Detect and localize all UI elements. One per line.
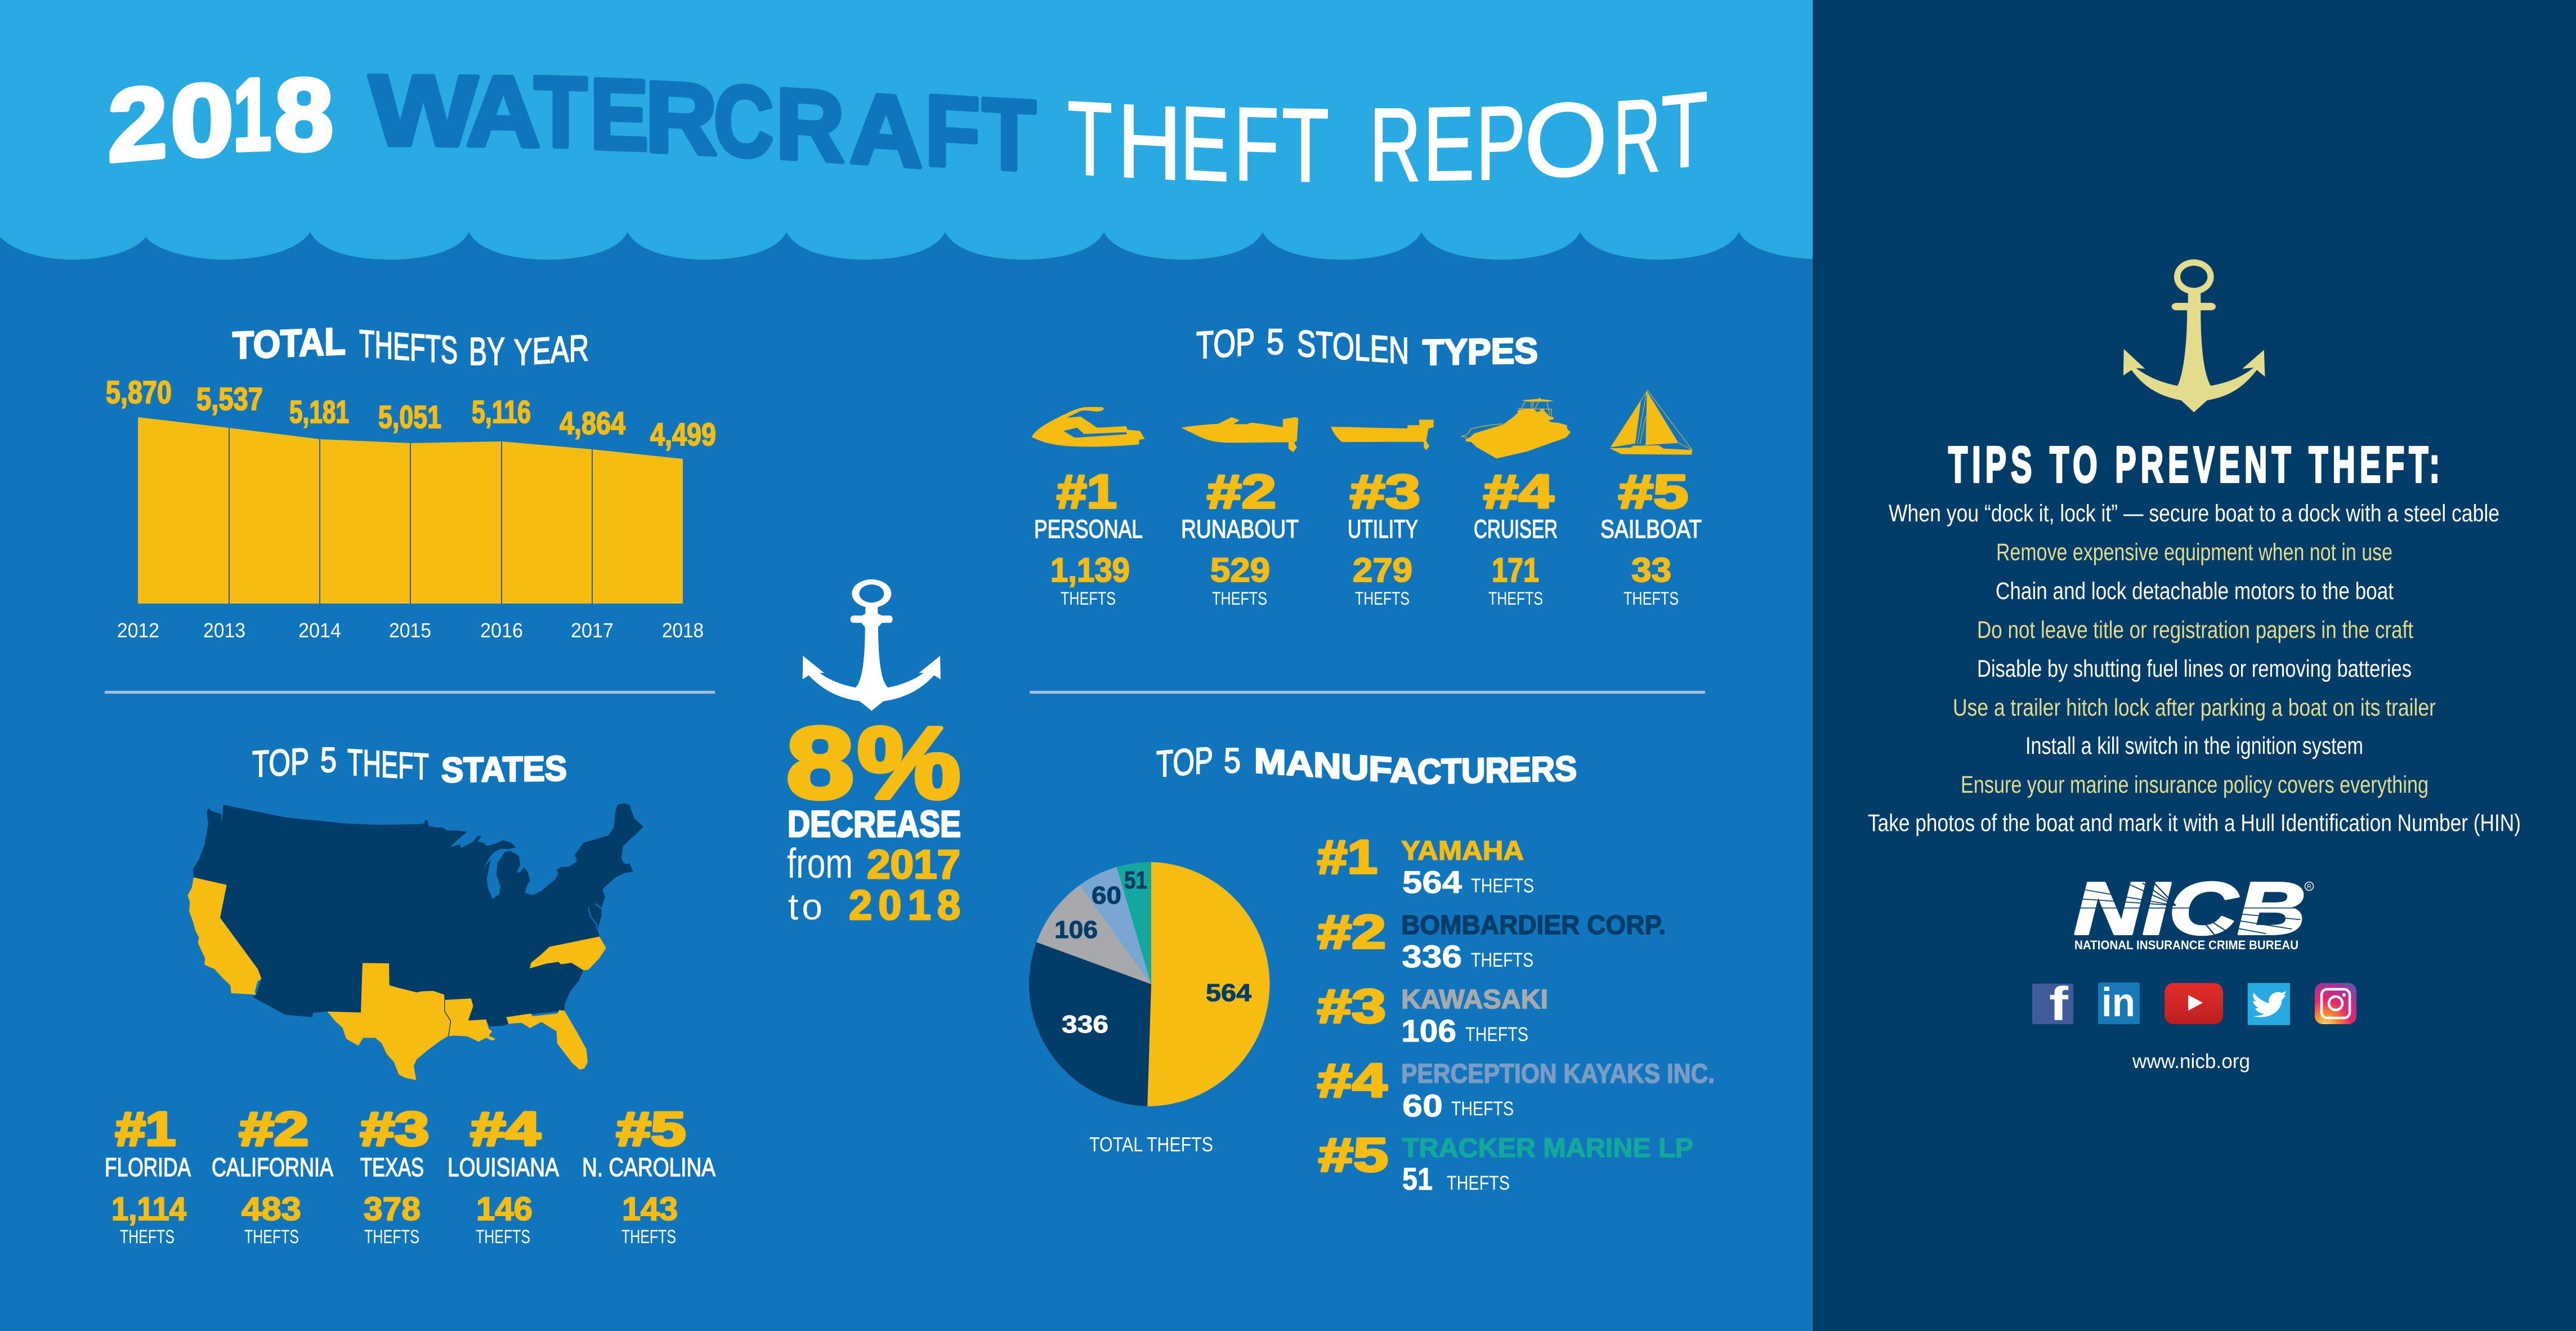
manufacturer thefts captions: THEFTS — [1451, 1098, 1514, 1120]
decrease: DECREASE — [788, 803, 961, 845]
state names: CALIFORNIA — [212, 1153, 333, 1182]
heading: top 5 theft states: 5 — [320, 741, 337, 780]
type values: 1,139 — [1050, 551, 1130, 589]
title words: THEFT REPORT: P — [1476, 84, 1526, 202]
state values: 143 — [622, 1191, 678, 1227]
chart years: 2013 — [203, 619, 245, 642]
title word: 2018: 2 — [108, 65, 167, 184]
title words: THEFT REPORT: E — [1423, 86, 1474, 203]
manufacturer values — [1401, 864, 1462, 1196]
chart years: 2012 — [117, 619, 159, 642]
heading: top 5 stolen types — [1196, 320, 1538, 373]
rank numbers: #3 — [1350, 465, 1420, 518]
state ranks — [115, 1102, 686, 1155]
rank numbers: #4 — [1483, 465, 1554, 518]
manufacturer thefts captions: THEFTS — [1465, 1024, 1528, 1046]
pie chart: 564 — [1206, 979, 1252, 1007]
type labels: CRUISER — [1474, 515, 1558, 543]
heading: top 5 manufacturers: TOP — [1156, 739, 1213, 785]
type labels — [1034, 515, 1702, 543]
type values: 33 — [1631, 551, 1671, 589]
callout: 8% decrease — [786, 579, 961, 928]
state thefts captions: THEFTS — [364, 1226, 419, 1248]
continental US — [193, 803, 643, 1026]
icon: cruiser — [1461, 397, 1571, 458]
tips list: Chain and lock detachable motors to the boat — [1996, 578, 2394, 605]
icon: facebook: f — [2049, 977, 2069, 1030]
heading: top 5 manufacturers: CTURERS — [1417, 749, 1577, 792]
manufacturer values: 60 — [1402, 1088, 1443, 1123]
type labels: PERSONAL — [1034, 515, 1143, 543]
state: Florida — [506, 1010, 588, 1070]
NICB logo: NATIONAL INSURANCE CRIME BUREAU — [2074, 938, 2298, 952]
type values — [1050, 551, 1671, 589]
pie chart — [1029, 862, 1269, 1106]
manufacturer names: PERCEPTION KAYAKS INC. — [1401, 1059, 1715, 1089]
tips list — [1868, 500, 2521, 837]
rank numbers: #2 — [1207, 465, 1276, 518]
title words: THEFT REPORT: F — [1234, 86, 1279, 203]
sky header with scalloped waves — [0, 0, 1813, 260]
pie chart: 106 — [1054, 916, 1098, 944]
title word: 2018: 1 — [233, 57, 271, 172]
type values: 529 — [1210, 551, 1270, 589]
icon: twitter — [2248, 983, 2290, 1025]
from: from — [787, 840, 853, 887]
title words: THEFT REPORT: T — [1661, 70, 1708, 191]
title word: WATERCRAFT: A — [849, 72, 923, 189]
state ranks: #5 — [616, 1102, 686, 1155]
title word: 2018: 0 — [171, 63, 234, 178]
title words: THEFT REPORT — [1067, 70, 1708, 204]
icon: sailboat — [1609, 390, 1692, 455]
tips list: Do not leave title or registration papers in the craft — [1977, 617, 2413, 644]
chart years: 2017 — [571, 619, 614, 642]
US map — [187, 803, 643, 1080]
chart values: 5,181 — [289, 394, 349, 430]
state names: LOUISIANA — [448, 1153, 559, 1182]
chart values: 5,116 — [472, 394, 531, 430]
type labels: UTILITY — [1348, 515, 1418, 543]
title word: WATERCRAFT: A — [466, 55, 540, 168]
8 percent: 8 — [786, 707, 854, 820]
heading: total thefts by year: TOTAL — [232, 320, 346, 367]
heading: top 5 theft states — [252, 740, 567, 790]
icon: linkedin: in — [2101, 980, 2135, 1025]
chart years — [117, 619, 704, 642]
icon: personal watercraft — [1032, 407, 1145, 446]
title word: WATERCRAFT: F — [925, 74, 980, 189]
state values: 378 — [364, 1191, 421, 1227]
state: Louisiana — [445, 998, 495, 1042]
tips list: Ensure your marine insurance policy covers everything — [1961, 771, 2429, 798]
chart years: 2018 — [662, 619, 704, 642]
NICB logo: NICB — [2074, 867, 2306, 950]
state values: 483 — [242, 1191, 301, 1227]
manufacturer names: BOMBARDIER CORP. — [1401, 910, 1666, 940]
manufacturer names: YAMAHA — [1401, 836, 1524, 866]
rank numbers: #1 — [1057, 465, 1117, 518]
title words: THEFT REPORT: T — [1067, 79, 1112, 198]
manufacturer ranks: #5 — [1318, 1128, 1388, 1181]
manufacturer values: 564 — [1402, 864, 1462, 900]
manufacturer names: TRACKER MARINE LP — [1402, 1133, 1693, 1163]
heading: top 5 manufacturers: 5 — [1224, 742, 1241, 780]
heading: total thefts by year: BY — [469, 329, 505, 373]
pie caption: TOTAL THEFTS — [1089, 1133, 1213, 1156]
title word: WATERCRAFT — [369, 54, 1036, 192]
chart values: 4,499 — [650, 417, 716, 453]
title word: WATERCRAFT: C — [714, 64, 773, 179]
title words: THEFT REPORT: E — [1180, 84, 1229, 203]
state names: TEXAS — [360, 1153, 424, 1182]
manufacturer thefts captions: THEFTS — [1447, 1172, 1510, 1194]
thefts captions: THEFTS — [1355, 588, 1410, 609]
tips list: Use a trailer hitch lock after parking a boat on its trailer — [1953, 694, 2436, 721]
to: to — [788, 886, 822, 927]
heading: top 5 stolen types: TOP — [1196, 320, 1255, 367]
chart values: 5,051 — [378, 399, 441, 435]
manufacturer values: 106 — [1401, 1013, 1456, 1048]
manufacturer names: KAWASAKI — [1401, 985, 1548, 1015]
title word: 2018: 8 — [275, 58, 333, 172]
state thefts captions: THEFTS — [244, 1226, 299, 1248]
title word: WATERCRAFT: R — [645, 60, 717, 176]
title word: WATERCRAFT: T — [534, 55, 587, 168]
heading: top 5 theft states: STATES — [441, 749, 567, 790]
state: North Carolina — [530, 936, 606, 970]
panel: top 5 theft states — [105, 740, 715, 1248]
manufacturer thefts captions: THEFTS — [1471, 949, 1533, 971]
icon: runabout — [1181, 417, 1298, 452]
manufacturer thefts captions — [1447, 875, 1534, 1194]
title words: THEFT REPORT: T — [1282, 87, 1329, 204]
icon: facebook — [2032, 977, 2073, 1030]
icons: boats — [1032, 390, 1692, 458]
type labels: SAILBOAT — [1600, 515, 1702, 543]
state ranks: #3 — [360, 1102, 429, 1155]
pie chart: 51 — [1124, 867, 1147, 894]
chart years: 2015 — [389, 619, 431, 642]
thefts captions: THEFTS — [1061, 588, 1116, 609]
state names: N. CAROLINA — [582, 1153, 715, 1182]
tips list: Disable by shutting fuel lines or removing batteries — [1977, 655, 2412, 682]
state values: 1,114 — [111, 1191, 186, 1227]
manufacturer ranks: #2 — [1317, 905, 1386, 958]
tips list: Remove expensive equipment when not in use — [1996, 539, 2392, 566]
pie chart: 336 — [1062, 1011, 1108, 1038]
manufacturer values: 51 — [1402, 1161, 1433, 1196]
title words: THEFT REPORT: O — [1524, 79, 1608, 200]
heading: top 5 stolen types: TYPES — [1423, 330, 1538, 373]
heading: top 5 theft states: THEFT — [347, 741, 429, 788]
state names — [105, 1153, 715, 1182]
8 percent — [786, 707, 960, 820]
heading: total thefts by year — [232, 320, 589, 374]
chart values: 4,864 — [560, 405, 625, 441]
state thefts captions: THEFTS — [120, 1226, 175, 1248]
title word: WATERCRAFT: T — [982, 77, 1036, 192]
2018: 2018 — [849, 882, 960, 928]
panel: total thefts by year — [106, 320, 716, 642]
state values: 146 — [476, 1191, 533, 1227]
right navy panel — [1813, 0, 2576, 1331]
type values: 279 — [1353, 551, 1412, 589]
icon: youtube — [2164, 983, 2223, 1024]
main blue background — [0, 0, 1813, 1331]
panel: top 5 manufacturers — [1029, 739, 1715, 1196]
heading: top 5 manufacturers: MANUFA — [1254, 742, 1417, 792]
state thefts captions: THEFTS — [476, 1226, 530, 1248]
title word: WATERCRAFT: E — [590, 57, 649, 172]
state thefts captions — [120, 1226, 676, 1248]
heading: top 5 stolen types: 5 — [1267, 321, 1284, 362]
thefts captions: THEFTS — [1488, 588, 1543, 609]
state: Texas — [328, 963, 451, 1080]
icon: utility boat — [1331, 419, 1434, 450]
heading: total thefts by year: THEFTS — [359, 322, 458, 372]
manufacturer ranks — [1317, 830, 1388, 1181]
icon: yellow anchor — [2123, 260, 2265, 412]
website: www.nicb.org — [2132, 1049, 2250, 1073]
icon: instagram — [2315, 983, 2356, 1024]
manufacturer values: 336 — [1402, 939, 1462, 974]
panel: top 5 stolen types — [1032, 320, 1702, 609]
rank numbers — [1057, 465, 1688, 518]
manufacturer names — [1401, 836, 1715, 1163]
state ranks: #4 — [471, 1102, 540, 1155]
state: California — [187, 877, 261, 995]
chart values — [106, 374, 716, 453]
state ranks: #2 — [239, 1102, 308, 1155]
thefts captions — [1061, 588, 1679, 609]
thefts captions: THEFTS — [1212, 588, 1267, 609]
type values: 171 — [1492, 551, 1539, 589]
area chart — [138, 417, 683, 604]
state ranks: #1 — [115, 1102, 176, 1155]
8 percent: % — [857, 707, 960, 820]
NICB logo: R — [2307, 883, 2311, 890]
title word: WATERCRAFT: R — [776, 67, 844, 183]
heading: total thefts by year: YEAR — [514, 327, 589, 374]
pie chart: 60 — [1092, 882, 1121, 909]
icon: white anchor — [803, 579, 941, 711]
rank numbers: #5 — [1618, 465, 1688, 518]
title words: THEFT REPORT: H — [1117, 82, 1182, 202]
title — [108, 54, 1708, 204]
heading: top 5 theft states: TOP — [252, 740, 309, 785]
tips heading: TIPS TO PREVENT THEFT: — [1948, 436, 2440, 493]
tips list: Install a kill switch in the ignition system — [2025, 733, 2363, 760]
manufacturer thefts captions: THEFTS — [1471, 875, 1534, 897]
thefts captions: THEFTS — [1624, 588, 1679, 609]
panel: tips to prevent theft — [1868, 260, 2521, 1073]
title word: WATERCRAFT: W — [369, 54, 477, 167]
chart values: 5,537 — [196, 381, 263, 417]
state values — [111, 1191, 678, 1227]
heading: top 5 stolen types: STOLEN — [1297, 323, 1409, 372]
heading: top 5 manufacturers — [1156, 739, 1577, 792]
manufacturer ranks: #4 — [1317, 1054, 1387, 1107]
title words: THEFT REPORT: R — [1613, 77, 1661, 196]
type labels: RUNABOUT — [1181, 515, 1299, 543]
chart years: 2016 — [480, 619, 523, 642]
2017: 2017 — [867, 842, 960, 887]
title word: 2018 — [108, 57, 333, 184]
chart values: 5,870 — [106, 374, 172, 410]
manufacturer ranks: #1 — [1317, 830, 1378, 883]
state names: FLORIDA — [105, 1153, 191, 1182]
title words: THEFT REPORT: R — [1370, 87, 1421, 203]
state thefts captions: THEFTS — [621, 1226, 676, 1248]
chart years: 2014 — [298, 619, 341, 642]
manufacturer ranks: #3 — [1317, 980, 1386, 1033]
social icons — [2032, 977, 2356, 1030]
